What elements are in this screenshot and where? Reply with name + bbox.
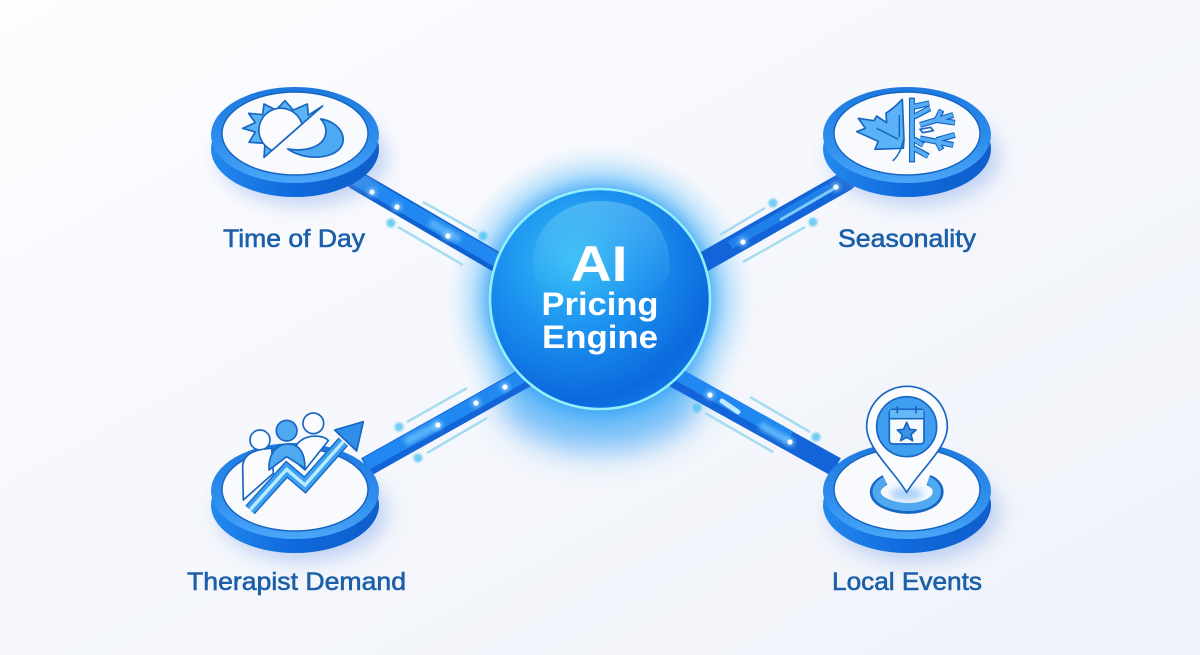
disc: time of day <box>211 87 387 205</box>
icon: people and rising arrow <box>243 413 363 510</box>
label: seasonality: Seasonality <box>838 225 977 253</box>
connector: seasonality <box>700 181 846 264</box>
connector: local events <box>670 370 836 467</box>
heading: Engine: Engine <box>542 319 658 355</box>
label: time of day: Time of Day <box>223 225 366 253</box>
icon: maple leaf and snowflake <box>857 98 955 162</box>
icon: sun and moon <box>243 101 343 157</box>
central sphere: AI Pricing Engine <box>490 189 710 409</box>
disc: therapist demand <box>211 443 387 561</box>
panel: local events <box>670 370 999 596</box>
sphere glow <box>445 144 755 454</box>
disc: seasonality <box>823 87 999 205</box>
icon: location pin with calendar <box>867 386 947 509</box>
panel: seasonality <box>700 87 999 264</box>
panel: time of day <box>211 87 500 265</box>
label: local events: Local Events <box>832 568 982 596</box>
connector: time of day <box>355 178 500 265</box>
heading: Pricing: Pricing <box>542 286 658 322</box>
panel: therapist demand <box>187 372 530 596</box>
heading: AI: AI <box>570 236 628 292</box>
disc: local events <box>823 443 999 561</box>
label: therapist demand: Therapist Demand <box>187 568 406 596</box>
connector: therapist demand <box>366 372 530 467</box>
